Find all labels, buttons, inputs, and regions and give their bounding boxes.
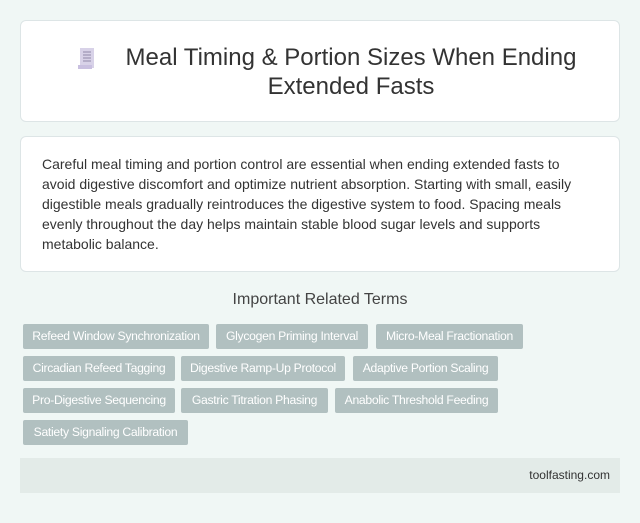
tags: Adaptive Portion Scaling	[363, 361, 488, 375]
section heading: Important Related Terms	[233, 291, 407, 308]
tags: Anabolic Threshold Feeding	[345, 393, 488, 407]
tags: Circadian Refeed Tagging	[33, 361, 165, 375]
tags: Satiety Signaling Calibration	[34, 425, 177, 439]
icon: receipt	[78, 48, 94, 69]
description card	[20, 136, 620, 272]
tags: Pro-Digestive Sequencing	[32, 393, 166, 407]
tags: Micro-Meal Fractionation	[386, 329, 513, 343]
tags: Glycogen Priming Interval	[226, 329, 358, 343]
tags: Digestive Ramp-Up Protocol	[190, 361, 336, 375]
header card	[20, 20, 620, 122]
footer	[20, 458, 620, 493]
title: Meal Timing & Portion Sizes When Ending Extended Fasts	[126, 44, 576, 100]
tags: Refeed Window Synchronization	[32, 329, 200, 343]
footer text: toolfasting.com	[529, 468, 610, 482]
description text: Careful meal timing and portion control are essential when ending extended fasts to avoid digestive discomfort and optimize nutrient absorption. Starting with small, easily digestible meals gradually reintroduces the digestive system to food. Spacing meals evenly throughout the day helps maintain stable blood sugar levels and supports metabolic balance.	[42, 156, 571, 252]
tags: Gastric Titration Phasing	[192, 393, 317, 407]
